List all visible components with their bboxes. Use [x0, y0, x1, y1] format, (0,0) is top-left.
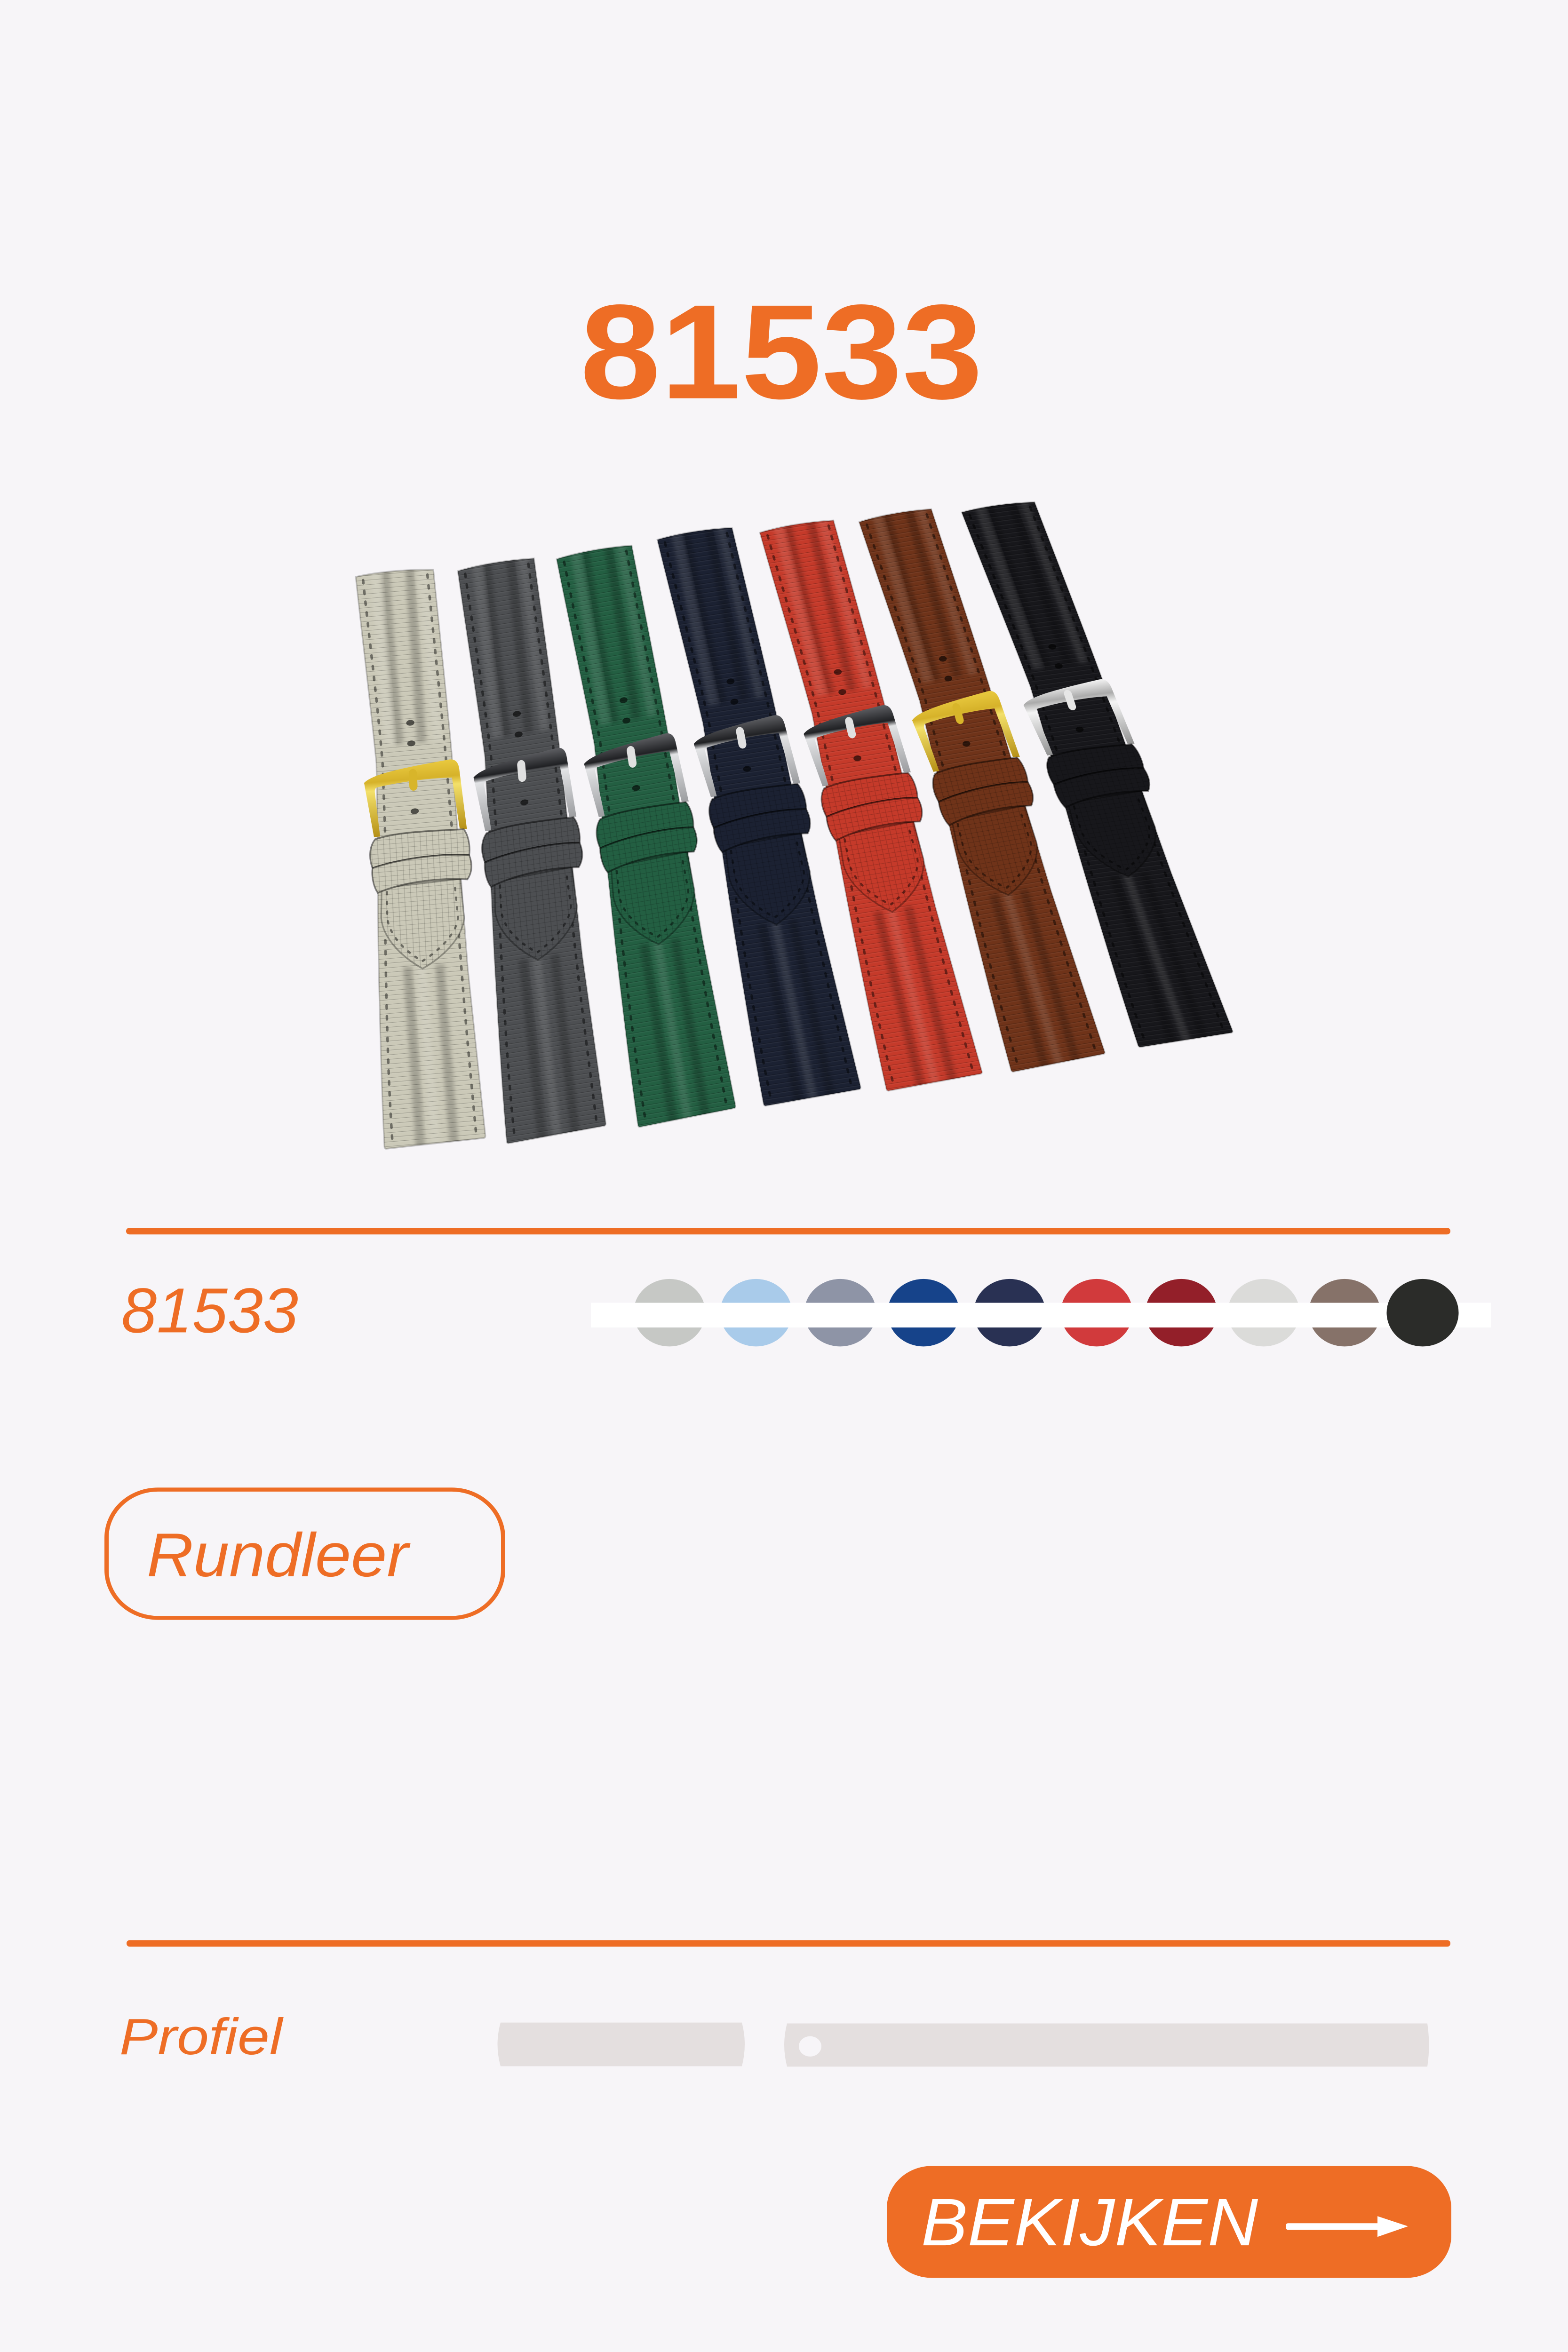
strap: navy with silver buckle: [654, 519, 862, 1110]
strap: brown with gold buckle: [856, 500, 1106, 1076]
product photo: seven watch straps: [353, 494, 1235, 1152]
profile label: Profiel: [119, 2008, 284, 2065]
strap: beige with gold buckle: [353, 562, 486, 1152]
colour swatches: [591, 1279, 1491, 1346]
strap: black with silver buckle: [958, 494, 1235, 1051]
profile shape: short strap piece: [498, 2023, 745, 2066]
profile shape: long strap piece with hole: [784, 2024, 1429, 2066]
article number: 81533: [121, 1275, 298, 1346]
icon: arrow: [1286, 2216, 1408, 2237]
title: 81533: [580, 276, 983, 427]
material tag: Rundleer: [147, 1520, 411, 1589]
button: BEKIJKEN: [921, 2185, 1258, 2260]
strap: grey with silver buckle: [455, 549, 606, 1147]
material tag: [106, 1490, 503, 1618]
strap: green with silver buckle: [554, 536, 737, 1131]
strap: red with silver buckle: [756, 511, 984, 1095]
button: [887, 2166, 1451, 2278]
